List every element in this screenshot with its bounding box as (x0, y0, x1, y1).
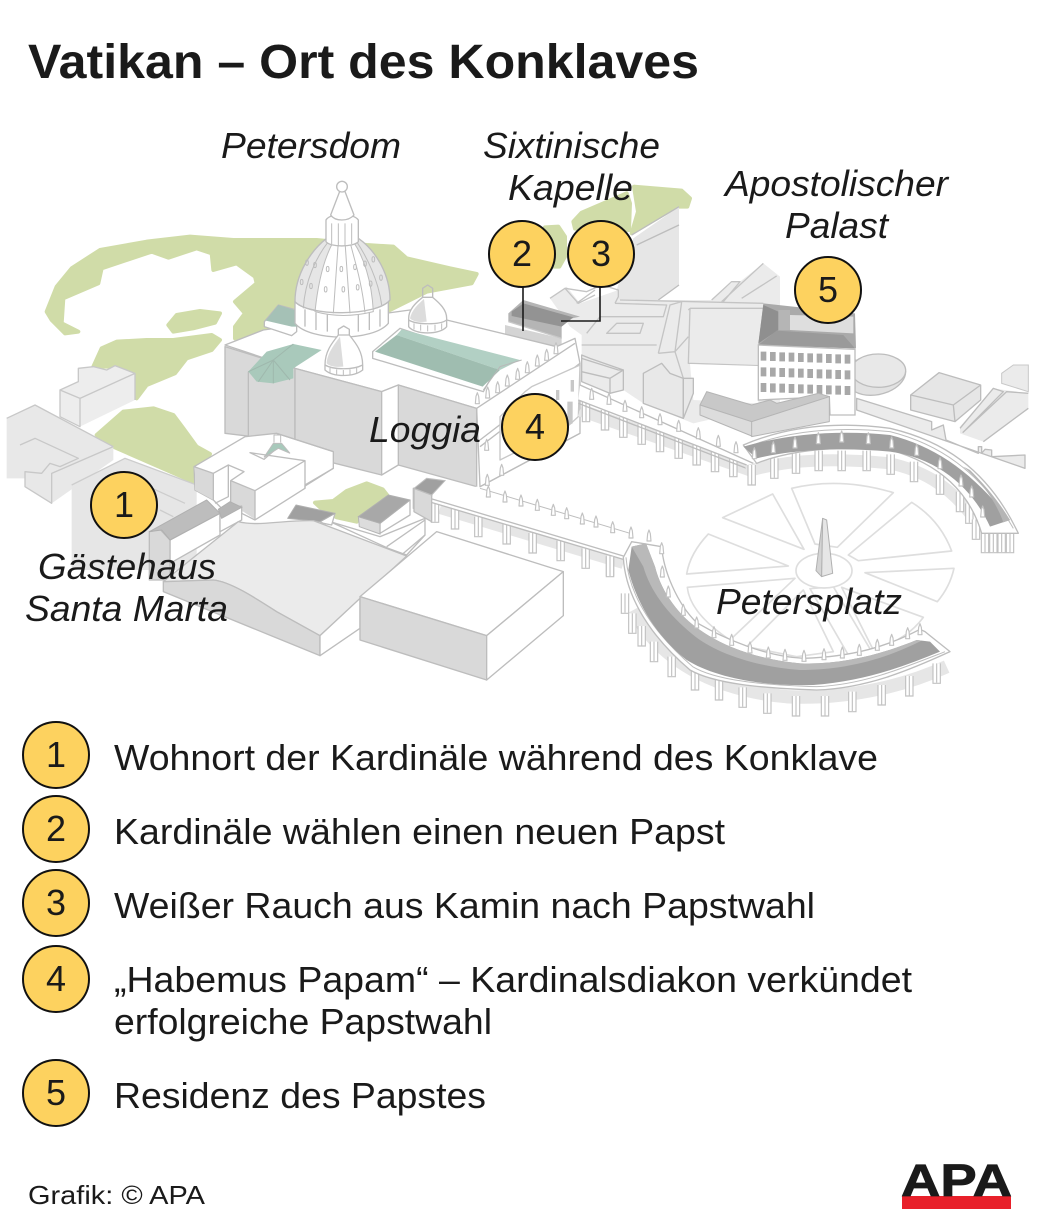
legend item 1: Wohnort der Kardinäle während des Konklave (114, 737, 878, 778)
road (857, 398, 1025, 468)
green court (315, 483, 387, 522)
long teal roof (373, 328, 522, 392)
legend item 2: 2 (46, 808, 66, 849)
tower (413, 488, 432, 518)
legend item 4: 4 (46, 958, 66, 999)
basilica roof and walls (225, 310, 580, 487)
marker 1 (91, 472, 157, 538)
legend item 5 (23, 1060, 486, 1126)
left buildings (7, 366, 197, 570)
right colonnade straight (578, 385, 753, 477)
legend item 3 (23, 870, 815, 936)
label: Apostolischer Palast: Palast (785, 205, 890, 246)
small house right (358, 495, 410, 534)
legend item 2: Kardinäle wählen einen neuen Papst (114, 811, 725, 852)
statues on the facade (475, 343, 558, 485)
label: Petersdom: Petersdom (221, 125, 401, 166)
APA logo: APA (901, 1155, 1012, 1206)
right colonnade hemicycle (743, 425, 1018, 553)
legend item 4: erfolgreiche Papstwahl (114, 1001, 492, 1042)
label: Petersplatz: Petersplatz (716, 581, 902, 622)
label: Loggia: Loggia (369, 409, 481, 450)
marker 5 (795, 257, 861, 323)
west teal roof (248, 344, 322, 383)
large block (360, 532, 563, 680)
small dome rear (409, 285, 447, 333)
legend item 4: „Habemus Papam“ – Kardinalsdiakon verkündet (114, 959, 912, 1000)
steps block (330, 518, 425, 555)
palace roof (758, 303, 856, 348)
label: Gästehaus Santa Marta: Santa Marta (25, 588, 228, 629)
palace windows (761, 352, 850, 395)
title: Vatikan – Ort des Konklaves (28, 36, 699, 89)
label: Apostolischer Palast: Apostolischer (723, 163, 950, 204)
roofed hall (163, 521, 407, 656)
marker 3 (568, 221, 634, 287)
St Peter's Basilica (225, 181, 580, 487)
label: Sixtinische Kapelle: Sixtinische (483, 125, 660, 166)
marker 1: 1 (114, 484, 134, 525)
label: Gästehaus Santa Marta: Gästehaus (38, 546, 216, 587)
loggia arch on facade (500, 365, 580, 460)
marker 2: 2 (512, 233, 532, 274)
source credit: Grafik: © APA (28, 1180, 206, 1210)
legend item 3: Weißer Rauch aus Kamin nach Papstwahl (114, 885, 815, 926)
illustration: Vatican aerial view (7, 181, 1028, 716)
buildings behind and right of the basilica (505, 207, 780, 423)
palace facade (758, 345, 855, 415)
legend item 1: 1 (46, 734, 66, 775)
label: Apostolischer Palast (723, 163, 950, 246)
obelisk (816, 518, 833, 577)
gardens (47, 237, 477, 482)
label: Sixtinische Kapelle (483, 125, 660, 208)
marker 5: 5 (818, 269, 838, 310)
legend item 3: 3 (46, 882, 66, 923)
legend item 5: Residenz des Papstes (114, 1075, 486, 1116)
west wing building (149, 500, 242, 580)
main dome (295, 181, 390, 337)
cross-shaped building (194, 433, 333, 520)
small house left (288, 505, 335, 525)
legend item 5: 5 (46, 1072, 66, 1113)
L-shaped wing (700, 392, 829, 437)
marker 3: 3 (591, 233, 611, 274)
legend item 2 (23, 796, 725, 862)
leader lines (523, 287, 600, 331)
Petersplatz pavement (687, 483, 954, 657)
Sistine Chapel roof (505, 300, 580, 350)
marker 4: 4 (525, 406, 545, 447)
round building (851, 354, 906, 395)
left colonnade hemicycle (606, 522, 950, 716)
legend item 1 (23, 722, 878, 788)
marker 2 (489, 221, 555, 287)
small dome front (325, 326, 363, 375)
Apostolic Palace, rotunda and eastern buildings (700, 303, 1028, 468)
label: Sixtinische Kapelle: Kapelle (508, 167, 633, 208)
front buildings (149, 433, 432, 580)
legend item 4 (23, 946, 912, 1042)
marker 4 (502, 394, 568, 460)
label: Gästehaus Santa Marta (25, 546, 228, 629)
eastern blocks (911, 365, 1028, 442)
left colonnade straight (414, 478, 630, 576)
